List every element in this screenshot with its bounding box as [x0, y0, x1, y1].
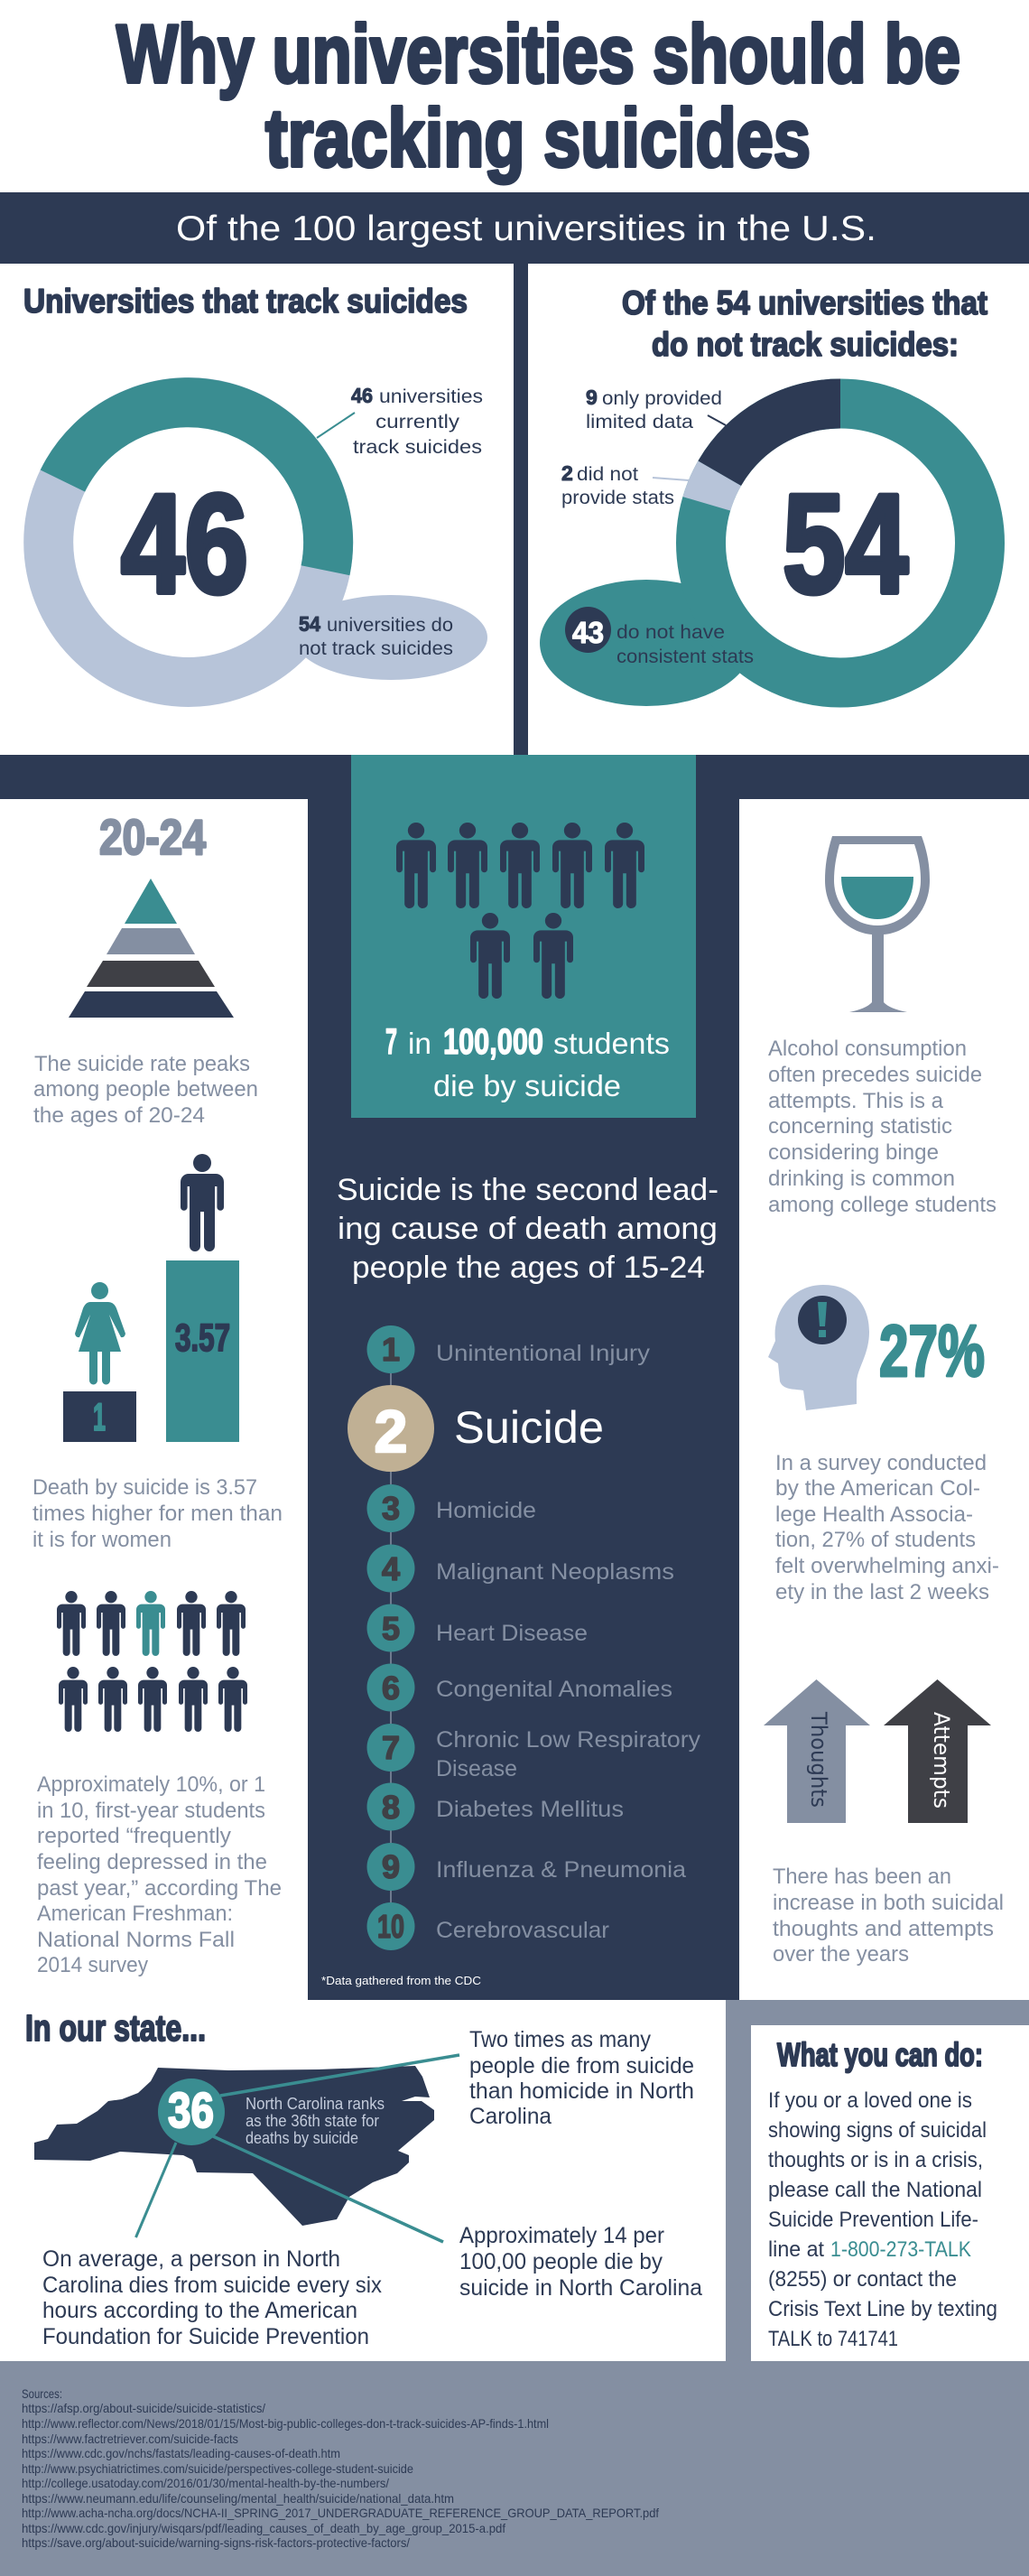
source list: https://www.cdc.gov/injury/wisqars/pdf/leading_causes_of_death_by_age_group_2015-a.pdf [22, 2521, 505, 2535]
label: 9 limited data: 9 [586, 386, 598, 409]
text: alcohol: often precedes suicide [768, 1063, 982, 1087]
text: help line: 1-800-273-TALK [830, 2237, 971, 2262]
panel: 1 in 10 depressed [37, 1591, 282, 1977]
label: 43 inconsistent: consistent stats [616, 646, 754, 667]
donut chart: 46 [49, 403, 329, 683]
source list: http://www.acha-ncha.org/docs/NCHA-II_SPRING_2017_UNDERGRADUATE_REFERENCE_GROUP_DATA_REPORT.pdf [22, 2506, 659, 2520]
cause labels: Homicide [436, 1498, 536, 1523]
text: help line: Crisis Text Line by texting [768, 2297, 997, 2321]
title: tracking suicides [265, 93, 811, 184]
donut chart: 54 [700, 404, 980, 683]
text: age peak: among people between [33, 1077, 258, 1102]
callout blob [294, 595, 487, 680]
panel: leading causes [321, 1173, 718, 1987]
big number 46: 46 [121, 466, 248, 623]
text: depression statistic: National Norms Fall [37, 1928, 235, 1952]
panel: what you can do [726, 2000, 1029, 2361]
cause labels: Diabetes Mellitus [436, 1797, 624, 1822]
numbers: 10 [377, 1908, 404, 1945]
text: anxiety: felt overwhelming anxi- [775, 1554, 999, 1578]
text: two times: people die from suicide [469, 2053, 694, 2078]
heading: second leading cause [337, 1173, 718, 1285]
text: two times: than homicide in North [469, 2078, 694, 2104]
cause labels: Unintentional Injury [436, 1341, 651, 1366]
text: men vs women: it is for women [32, 1528, 172, 1552]
label: 43 inconsistent: 43 [572, 616, 604, 649]
text: two times [469, 2027, 694, 2129]
text: help line [768, 2088, 997, 2351]
numbers: 1 [382, 1331, 400, 1368]
label: 54 universities [299, 612, 453, 659]
big number 54: 54 [783, 466, 908, 623]
panel: universities that do not track [540, 284, 987, 706]
label: 54 universities: universities do [327, 615, 453, 636]
statistic text: 100,000 [443, 1022, 543, 1062]
panel: sources [0, 2361, 1029, 2576]
cause labels: Heart Disease [436, 1621, 588, 1646]
cause labels: Congenital Anomalies [436, 1677, 672, 1702]
statistic text: students [553, 1027, 670, 1060]
text: men vs women: Death by suicide is 3.57 [32, 1475, 257, 1500]
cause labels: Chronic Low Respiratory [436, 1727, 701, 1753]
numbers: 2 [375, 1398, 407, 1465]
label: 2 did not provide: did not [577, 464, 638, 485]
numbers: 6 [382, 1669, 400, 1706]
icon: woman [75, 1282, 125, 1385]
map caption: North Carolina ranks [246, 2095, 385, 2113]
panel: thoughts and attempts [764, 1679, 1004, 1967]
number circles [348, 1325, 434, 1950]
numbers: 3 [382, 1490, 400, 1527]
source list: http://www.psychiatrictimes.com/suicide/perspectives-college-student-suicide [22, 2461, 413, 2476]
text: every six hours: Carolina dies from suicide every six [42, 2273, 382, 2298]
arrow: thoughts: Thoughts [806, 1711, 831, 1808]
icon grid: people [57, 1591, 247, 1732]
text: alcohol: Alcohol consumption [768, 1037, 967, 1061]
label: 54 universities: not track suicides [299, 638, 453, 659]
source list: Sources: [22, 2386, 62, 2401]
label: 9 limited data [586, 386, 726, 432]
text: alcohol [768, 1037, 997, 1217]
source list: https://www.neumann.edu/life/counseling/mental_health/suicide/national_data.htm [22, 2491, 454, 2506]
label: 9 limited data: limited data [586, 412, 693, 432]
text: help line: (8255) or contact the [768, 2267, 957, 2292]
panel: anxiety [768, 1285, 999, 1604]
text: help line: TALK to 741741 [768, 2327, 898, 2351]
text: depression statistic: American Freshman: [37, 1902, 233, 1926]
cause labels: Cerebrovascular [436, 1918, 609, 1943]
numbers [375, 1331, 407, 1945]
bar: men: 3.57 [175, 1316, 230, 1360]
text: depression statistic: feeling depressed in the [37, 1850, 267, 1874]
text: increase [773, 1865, 1004, 1967]
map caption: as the 36th state for [246, 2112, 379, 2130]
label: 46 universities: track suicides [353, 437, 482, 458]
cause labels: Disease [436, 1756, 517, 1781]
panel: in our state [25, 2007, 702, 2349]
text: alcohol: attempts. This is a [768, 1089, 944, 1113]
numbers: 4 [382, 1550, 400, 1587]
map caption [246, 2095, 385, 2147]
text: age peak: the ages of 20-24 [33, 1103, 205, 1128]
text: increase: There has been an [773, 1865, 951, 1889]
cause labels: Suicide [454, 1402, 604, 1453]
text: 14 per 100,000: 100,00 people die by [459, 2249, 663, 2274]
map: North Carolina [34, 2066, 434, 2226]
cause labels [436, 1341, 701, 1943]
numbers: 8 [382, 1789, 400, 1826]
leader line [317, 413, 355, 438]
text: help line: thoughts or is in a crisis, [768, 2148, 983, 2172]
map caption: deaths by suicide [246, 2129, 358, 2147]
bar: women [63, 1391, 136, 1442]
label: 43 inconsistent [565, 607, 754, 667]
text: alcohol: among college students [768, 1193, 997, 1217]
heading: second leading cause: Suicide is the second lead- [337, 1173, 718, 1207]
heading: not track [622, 284, 987, 363]
source list: https://www.factretriever.com/suicide-facts [22, 2432, 238, 2446]
panel: 7 in 100,000 [351, 755, 696, 1118]
heading: second leading cause: people the ages of 15-24 [352, 1251, 705, 1285]
label: 9 limited data: only provided [602, 388, 722, 409]
text: every six hours: On average, a person in North [42, 2246, 340, 2272]
label: 46 universities: 46 [351, 384, 373, 407]
label: 43 inconsistent: do not have [616, 622, 725, 643]
text: depression statistic: past year,” according The [37, 1876, 282, 1901]
arrow: attempts: Attempts [929, 1712, 954, 1809]
text: every six hours [42, 2246, 382, 2349]
statistic text: die by suicide [433, 1069, 621, 1102]
statistic text: 7 [385, 1022, 397, 1062]
text: alcohol: concerning statistic [768, 1114, 952, 1139]
label: 2 did not provide: 2 [561, 461, 573, 485]
text: increase: increase in both suicidal [773, 1891, 1004, 1915]
text: 14 per 100,000: suicide in North Carolina [459, 2275, 702, 2301]
text: anxiety [775, 1451, 999, 1604]
source list: https://www.cdc.gov/nchs/fastats/leading-causes-of-death.htm [22, 2446, 340, 2460]
text: help line: please call the National [768, 2178, 982, 2202]
stat 27%: 27% [879, 1311, 985, 1392]
vertical divider [514, 264, 528, 756]
text: 14 per 100,000: Approximately 14 per [459, 2223, 664, 2248]
bar: women: 1 [93, 1396, 106, 1439]
title [116, 9, 960, 184]
numbers: 9 [382, 1848, 400, 1885]
text: two times: Carolina [469, 2104, 552, 2129]
source list [22, 2386, 659, 2550]
text: depression statistic: Approximately 10%, or 1 [37, 1772, 265, 1797]
text: increase: thoughts and attempts [773, 1917, 994, 1941]
panel: age peak [33, 809, 258, 1128]
numbers: 5 [382, 1610, 400, 1647]
text: age peak: The suicide rate peaks [34, 1052, 250, 1076]
text: every six hours: hours according to the American [42, 2298, 357, 2323]
label: 2 did not provide [561, 461, 689, 508]
statistic text: in [408, 1027, 431, 1060]
text: anxiety: ety in the last 2 weeks [775, 1580, 989, 1604]
connector lines [135, 2055, 459, 2242]
icon: head with exclamation [768, 1285, 869, 1410]
text: two times: Two times as many [469, 2027, 651, 2052]
text: help line: showing signs of suicidal [768, 2118, 987, 2143]
text: age peak [33, 1052, 258, 1128]
label: 46 universities: universities [379, 386, 483, 407]
heading: in our state: In our state... [25, 2007, 206, 2049]
rank badge 36 [158, 2078, 225, 2145]
text: men vs women: times higher for men than [32, 1502, 283, 1526]
source list: http://www.reflector.com/News/2018/01/15/Most-big-public-colleges-don-t-track-suicides-AP-finds-1.html [22, 2416, 549, 2431]
text: help line: line at [768, 2237, 824, 2262]
statistic text [385, 1022, 670, 1102]
bar: men [166, 1260, 239, 1442]
callout blob [540, 580, 753, 706]
center dark column [308, 799, 739, 2000]
arrow: attempts [884, 1679, 991, 1823]
heading: not track: Of the 54 universities that [622, 284, 987, 321]
text: every six hours: Foundation for Suicide Prevention [42, 2324, 369, 2349]
text: anxiety: In a survey conducted [775, 1451, 987, 1475]
rank badge 36: 36 [168, 2082, 214, 2138]
label: 46 universities [351, 384, 483, 458]
icon: pyramid [69, 879, 234, 1018]
heading 20-24: 20-24 [99, 809, 206, 865]
text: anxiety: tion, 27% of students [775, 1528, 976, 1552]
heading: track: Universities that track suicides [23, 283, 468, 320]
people icons [396, 823, 644, 999]
text: alcohol: considering binge [768, 1140, 939, 1165]
numbers: 7 [382, 1729, 400, 1766]
text: alcohol: drinking is common [768, 1167, 955, 1191]
text: depression statistic: reported “frequently [37, 1824, 231, 1848]
text: men vs women [32, 1475, 283, 1552]
panel: alcohol [768, 836, 997, 1217]
panel: universities that track [23, 283, 487, 683]
text: depression statistic: 2014 survey [37, 1953, 148, 1977]
text: anxiety: by the American Col- [775, 1476, 980, 1501]
arrow: thoughts [764, 1679, 870, 1823]
text: depression statistic: in 10, first-year students [37, 1799, 265, 1823]
text: help line: If you or a loved one is [768, 2088, 972, 2113]
label: 54 universities: 54 [299, 612, 320, 636]
heading: second leading cause: ing cause of death among [338, 1212, 718, 1246]
source list: https://save.org/about-suicide/warning-signs-risk-factors-protective-factors/ [22, 2535, 410, 2550]
footnote: CDC: *Data gathered from the CDC [321, 1974, 481, 1987]
dark divider band [0, 755, 1029, 799]
header band: Of the 100 largest universities in the U.S. [176, 209, 876, 248]
cause labels: Malignant Neoplasms [436, 1559, 674, 1585]
text: help line: Suicide Prevention Life- [768, 2208, 978, 2232]
text: anxiety: lege Health Associa- [775, 1502, 973, 1527]
source list: http://college.usatoday.com/2016/01/30/mental-health-by-the-numbers/ [22, 2476, 389, 2490]
icon: man [181, 1154, 224, 1251]
icon: wine glass [825, 836, 930, 1012]
text: 14 per 100,000 [459, 2223, 702, 2301]
text: depression statistic [37, 1772, 282, 1977]
header band [0, 192, 1029, 264]
label: 2 did not provide: provide stats [561, 488, 674, 508]
panel: men vs women chart [32, 1154, 283, 1552]
cause labels: Influenza & Pneumonia [436, 1857, 686, 1883]
label: 46 universities: currently [375, 412, 460, 432]
heading: not track: do not track suicides: [652, 326, 959, 363]
text: increase: over the years [773, 1942, 909, 1967]
source list: https://afsp.org/about-suicide/suicide-statistics/ [22, 2401, 265, 2415]
